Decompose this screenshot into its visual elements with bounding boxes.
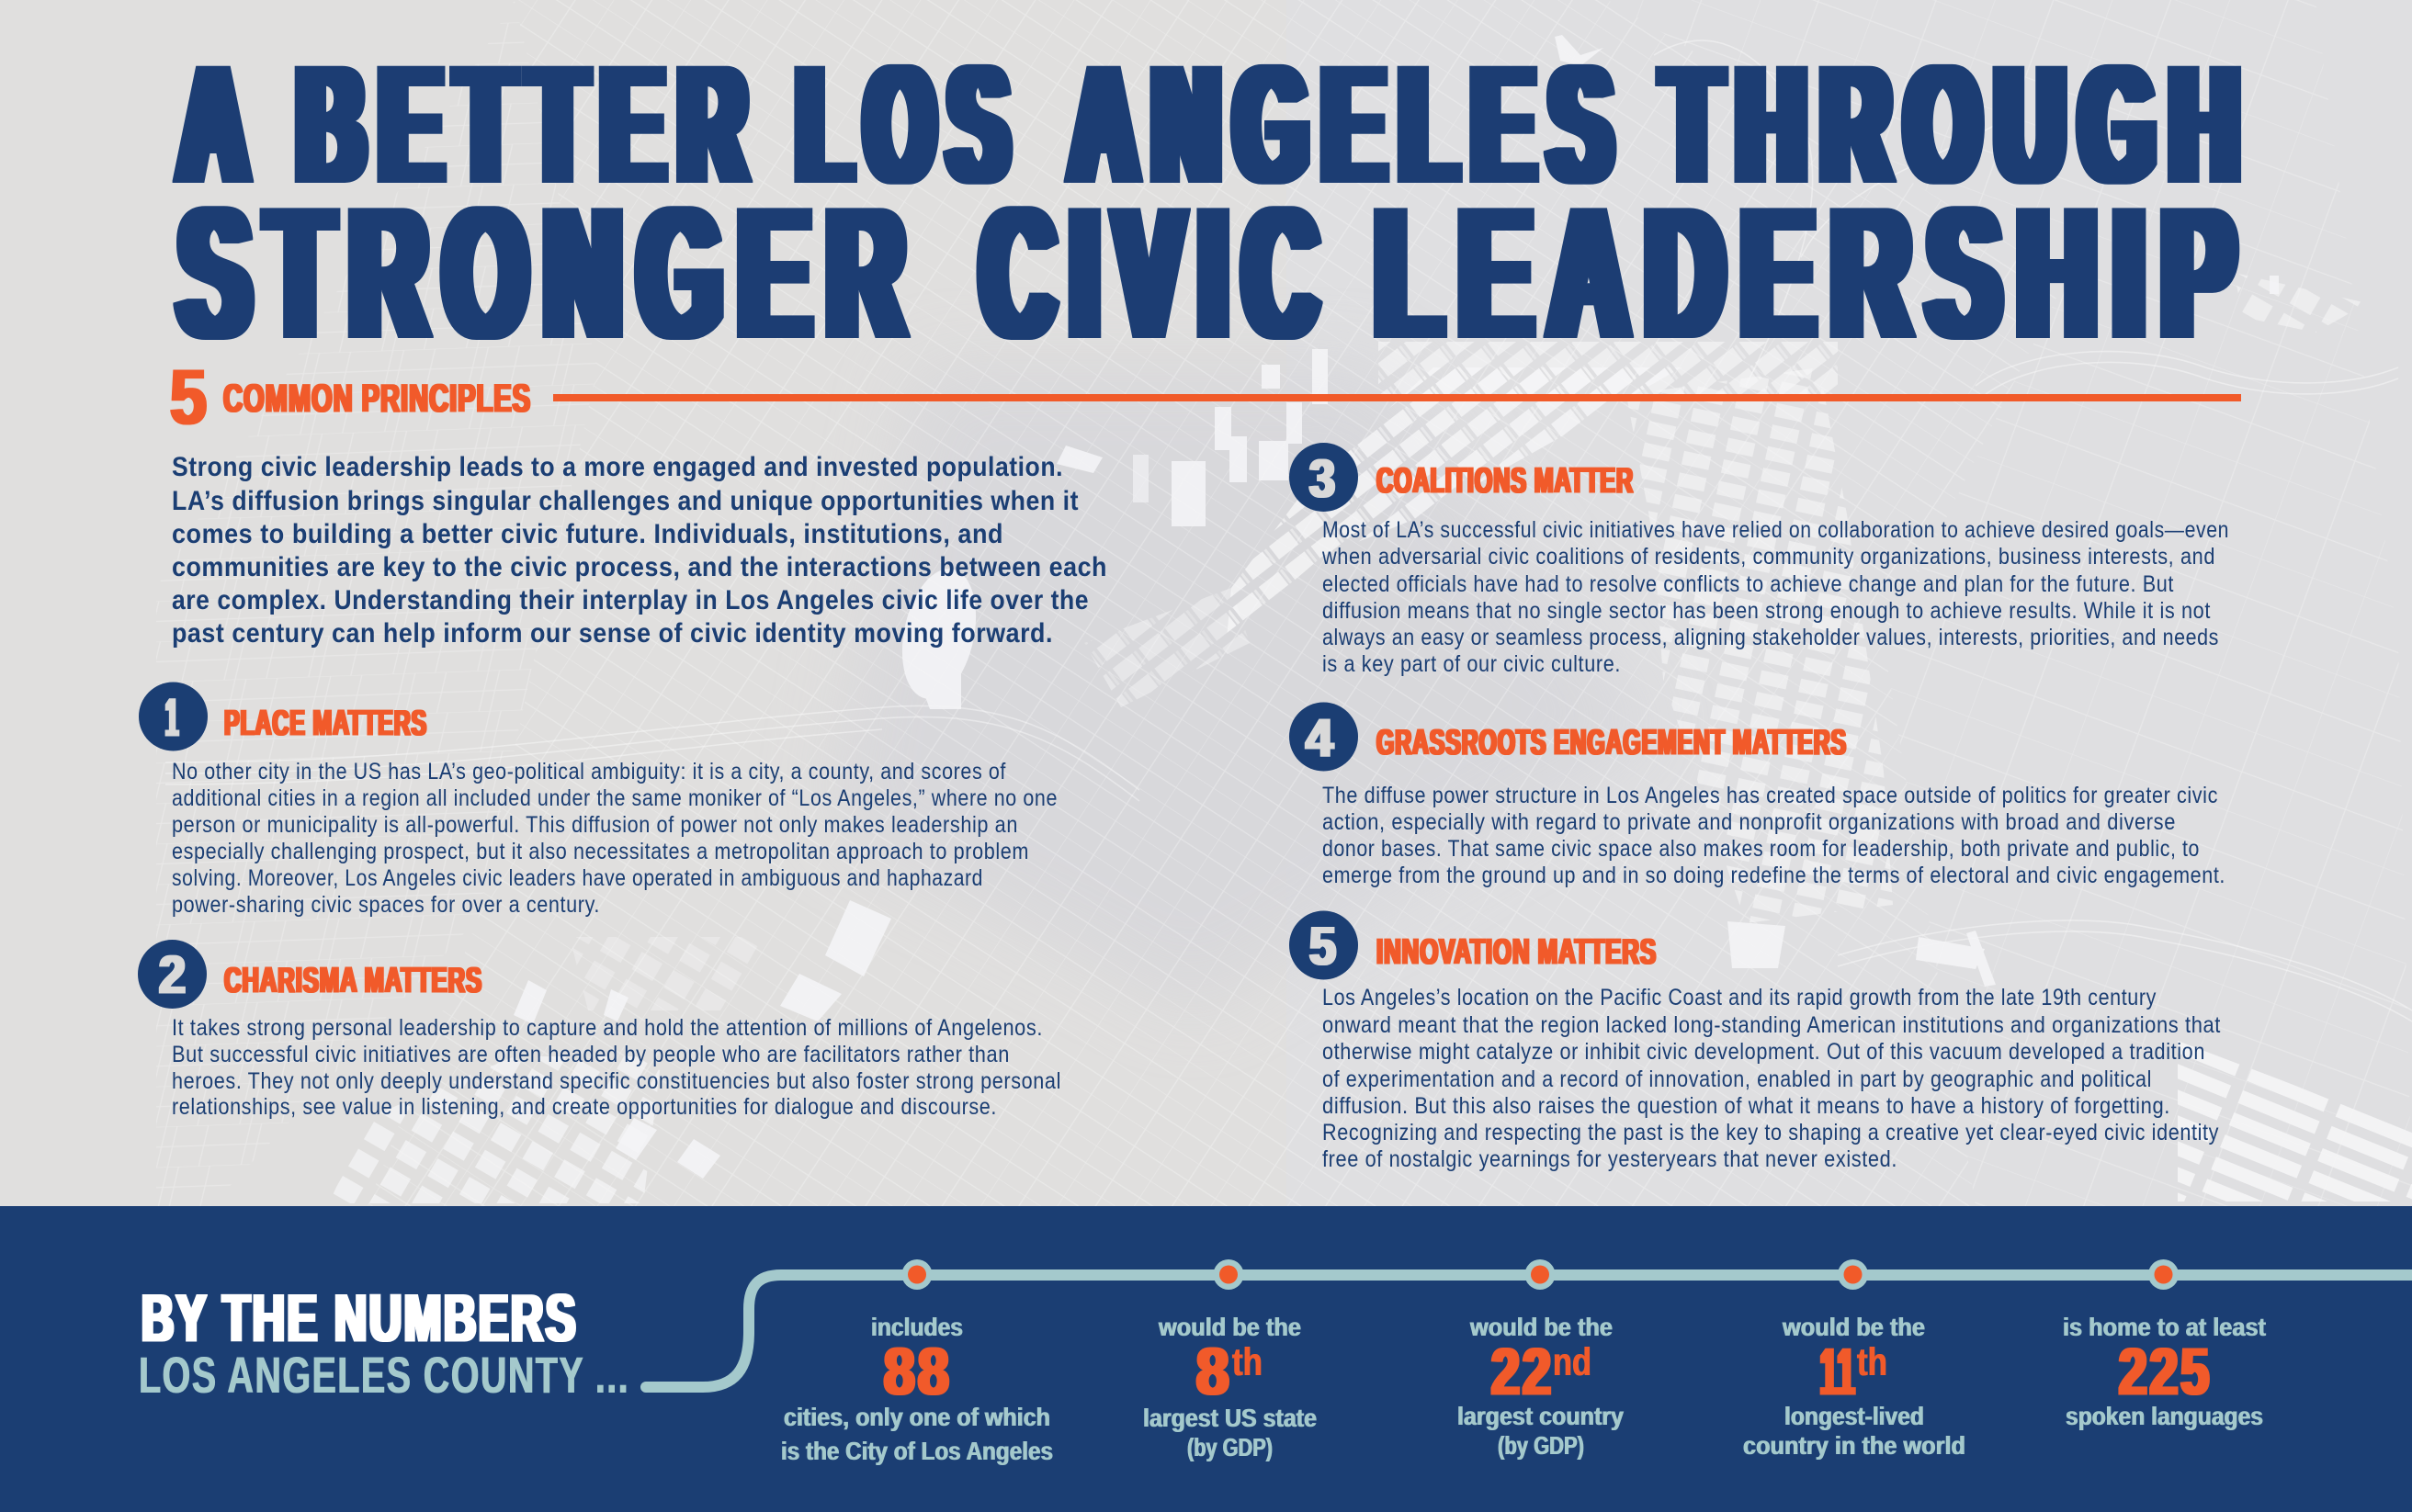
stat: 8th largest US state: th [1232,1340,1263,1384]
body text: onward meant that the region lacked long-standing American institutions and organizations that [1322,1012,2221,1038]
number 5: 5 [170,354,207,440]
body text: But successful civic initiatives are often headed by people who are facilitators rather than [172,1042,1010,1067]
body text: is a key part of our civic culture. [1322,651,1621,677]
intro paragraph: LA’s diffusion brings singular challenges and unique opportunities when it [172,486,1079,516]
body text: elected officials have had to resolve conflicts to achieve change and plan for the future. But [1322,571,2174,597]
stat: 22nd largest country [1457,1259,1624,1460]
stat: 8th largest US state: largest US state [1143,1404,1317,1432]
title: CIVIC [981,169,1333,378]
stat: 22nd largest country: 22 [1491,1336,1554,1409]
heading: GRASSROOTS ENGAGEMENT MATTERS [1376,723,1847,762]
stat: 8th largest US state [1143,1259,1317,1461]
stat: 88 cities: 88 [884,1336,952,1409]
heading: PLACE MATTERS [224,704,427,743]
number badge 2 [138,940,207,1009]
stat: 11th longest-lived country: country in the world [1743,1431,1965,1460]
body text: No other city in the US has LA’s geo-political ambiguity: it is a city, a county, and scores of [172,759,1006,784]
stat: 88 cities: includes [871,1313,963,1341]
background: aerial street map of Los Angeles [0,0,2412,1206]
panel: by the numbers band [0,1206,2412,1512]
section heading: 5 common principles [170,354,2241,440]
body text [172,759,1058,918]
panel: principle 5 innovation matters [1289,911,2221,1172]
stat: 8th largest US state: 8 [1196,1336,1232,1409]
body text [1321,517,2229,677]
body text [172,1015,1061,1120]
body text: always an easy or seamless process, aligning stakeholder values, interests, priorities, and needs [1322,625,2219,650]
stat: 88 cities: is the City of Los Angeles [781,1437,1053,1465]
stat: 225 spoken languages: spoken languages [2066,1402,2263,1430]
body text: diffusion. But this also raises the question of what it means to have a history of forgetting. [1322,1093,2170,1119]
number badge 2: 2 [159,945,186,1005]
body text: diffusion means that no single sector has been strong enough to achieve results. While it is not [1322,598,2211,624]
body text: power-sharing civic spaces for over a century. [172,892,600,918]
body text: person or municipality is all-powerful. This diffusion of power not only makes leadership an [172,812,1018,838]
band heading: BY THE NUMBERS [142,1281,578,1356]
body text: donor bases. That same civic space also makes room for leadership, both private and public, to [1322,836,2200,862]
number badge 5: 5 [1309,917,1336,976]
number badge 5 [1289,911,1358,979]
panel: principle 3 coalitions matter [1289,443,2229,677]
body text: of experimentation and a record of innovation, enabled in part by geographic and political [1322,1066,2152,1092]
stat: 22nd largest country: nd [1553,1340,1591,1384]
body text: otherwise might catalyze or inhibit civic development. Out of this vacuum developed a tradition [1322,1039,2205,1065]
number badge 1: 1 [165,688,178,748]
heading: COALITIONS MATTER [1376,461,1634,501]
stat: 11th longest-lived country: 11 [1820,1336,1856,1409]
body text: free of nostalgic yearnings for yesteryears that never existed. [1322,1146,1897,1172]
number badge 1 [139,682,208,751]
body text: It takes strong personal leadership to capture and hold the attention of millions of Angelenos. [172,1015,1043,1041]
body text: additional cities in a region all included under the same moniker of “Los Angeles,” where no one [172,785,1058,811]
band heading [139,1281,629,1404]
number badge 3: 3 [1309,449,1335,509]
stat: 225 spoken languages: is home to at least [2063,1313,2266,1341]
body text: The diffuse power structure in Los Angeles has created space outside of politics for greater civic [1322,783,2218,808]
intro paragraph: are complex. Understanding their interplay in Los Angeles civic life over the [172,585,1089,615]
stat: 11th longest-lived country: th [1857,1340,1887,1384]
stat: 8th largest US state: (by GDP) [1187,1433,1273,1461]
band heading: LOS ANGELES COUNTY ... [139,1346,629,1404]
stat: 225 spoken languages [2063,1259,2266,1430]
stat: 22nd largest country: (by GDP) [1498,1431,1584,1460]
intro paragraph: communities are key to the civic process, and the interactions between each [172,552,1107,582]
body text [1322,783,2225,888]
stat: 22nd largest country: would be the [1469,1313,1613,1341]
heading: INNOVATION MATTERS [1376,932,1657,972]
stat: 11th longest-lived country: would be the [1782,1313,1925,1341]
body text: especially challenging prospect, but it also necessitates a metropolitan approach to problem [172,839,1029,864]
body text: Most of LA’s successful civic initiatives have relied on collaboration to achieve desired goals—even [1322,517,2229,543]
title: STRONGER [179,169,922,378]
title: BETTER [298,30,762,218]
panel: principle 4 grassroots engagement matters [1289,702,2225,888]
intro paragraph: comes to building a better civic future. Individuals, institutions, and [172,519,1003,549]
body text: Los Angeles’s location on the Pacific Coast and its rapid growth from the late 19th century [1322,985,2157,1010]
timeline connector line [646,1275,2412,1387]
body text: relationships, see value in listening, and create opportunities for dialogue and discourse. [172,1094,997,1120]
heading: CHARISMA MATTERS [224,961,482,1000]
body text: solving. Moreover, Los Angeles civic leaders have operated in ambiguous and haphazard [172,865,983,891]
intro paragraph [172,452,1107,649]
title: A [179,30,264,218]
intro paragraph: past century can help inform our sense of civic identity moving forward. [172,618,1053,649]
number badge 4: 4 [1306,708,1333,768]
panel: principle 1 place matters [139,682,1058,918]
body text: Recognizing and respecting the past is the key to shaping a creative yet clear-eyed civic identity [1322,1120,2219,1145]
stat: 225 spoken languages: 225 [2119,1336,2212,1409]
panel: principle 2 charisma matters [138,940,1061,1120]
heading rule [553,394,2241,401]
number badge 3 [1289,443,1358,512]
stat: 88 cities [781,1259,1053,1465]
title: LOS [798,30,1023,218]
stat: 11th longest-lived country [1743,1259,1965,1460]
heading text: COMMON PRINCIPLES [223,377,531,421]
stat: 8th largest US state: would be the [1158,1313,1301,1341]
stat: 22nd largest country: largest country [1457,1402,1624,1430]
body text: emerge from the ground up and in so doing redefine the terms of electoral and civic engagement. [1322,863,2225,888]
title: ANGELES [1070,30,1627,218]
stat: 88 cities: cities, only one of which [784,1403,1050,1431]
intro paragraph: Strong civic leadership leads to a more engaged and invested population. [172,452,1063,482]
title [179,30,2255,378]
stat: 11th longest-lived country: longest-lived [1784,1402,1924,1430]
body text: heroes. They not only deeply understand specific constituencies but also foster strong personal [172,1068,1061,1094]
number badge 4 [1289,702,1358,772]
body text [1322,985,2221,1172]
body text: when adversarial civic coalitions of residents, community organizations, business interests, and [1321,544,2215,570]
body text: action, especially with regard to private and nonprofit organizations with broad and diverse [1322,809,2176,835]
